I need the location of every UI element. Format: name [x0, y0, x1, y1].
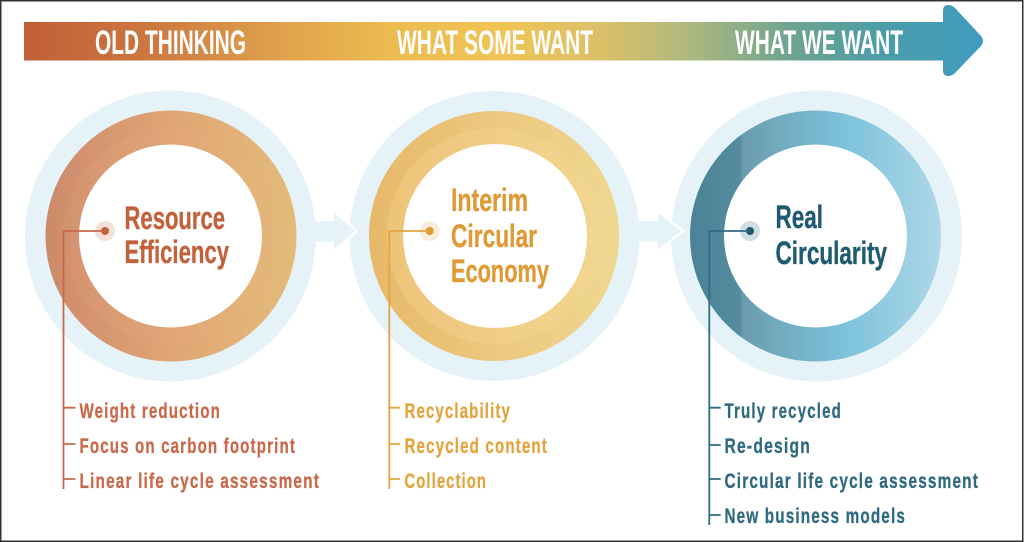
list: what we want items: Re-design: [724, 435, 811, 458]
ring 3: [690, 110, 941, 362]
panel: resource efficiency: [46, 110, 320, 493]
ring 1 inner glow: [63, 128, 279, 344]
panel: interim circular economy: [369, 111, 619, 493]
ring 2 inner glow: [386, 128, 602, 344]
heading: interim circular economy: Circular: [451, 218, 537, 254]
list: what we want items: New business models: [724, 505, 906, 528]
heading: real circularity: [776, 199, 887, 271]
heading: interim circular economy: [451, 182, 549, 289]
connector and dot 2: [389, 221, 440, 489]
label: what some want: WHAT SOME WANT: [397, 24, 593, 62]
connector arrow 2 outline: [658, 211, 683, 251]
top gradient arrow: [24, 5, 983, 76]
arrow shape: [24, 5, 983, 76]
connector and dot 1: [64, 221, 115, 489]
label: old thinking: OLD THINKING: [95, 24, 246, 62]
list: old thinking items: Focus on carbon footprint: [80, 435, 296, 458]
connector arrow 2: [633, 211, 683, 251]
list: what some want items: Collection: [404, 470, 487, 493]
label: what we want: WHAT WE WANT: [735, 24, 903, 62]
list: what some want items: [404, 400, 548, 493]
ring 3 centre: [724, 144, 907, 328]
list: old thinking items: Weight reduction: [80, 400, 221, 423]
pale halo: circle 3: [671, 90, 962, 382]
ring 1 centre: [79, 144, 262, 328]
connector arrow 1: [310, 211, 357, 251]
heading: resource efficiency: Efficiency: [124, 234, 229, 270]
connector arrow 1 outline: [334, 211, 357, 251]
pale halo: circle 1: [25, 90, 316, 382]
heading: interim circular economy: Interim: [451, 182, 528, 218]
panel: real circularity: [690, 110, 979, 528]
connector and dot 3: [709, 221, 760, 525]
list: what we want items: Truly recycled: [724, 400, 842, 423]
list: old thinking items: Linear life cycle assessment: [80, 470, 320, 493]
heading: resource efficiency: Resource: [124, 200, 225, 236]
ring 1: [46, 110, 296, 362]
list: what some want items: Recyclability: [404, 400, 511, 423]
ring 2 centre: [403, 144, 587, 328]
pale halo: circle 2: [350, 91, 640, 381]
heading: interim circular economy: Economy: [451, 253, 549, 289]
heading: resource efficiency: [124, 200, 229, 270]
list: old thinking items: [80, 400, 320, 493]
ring 2: [369, 111, 619, 361]
heading: real circularity: Circularity: [776, 235, 887, 271]
list: what some want items: Recycled content: [404, 435, 548, 458]
heading: real circularity: Real: [776, 199, 823, 235]
list: what we want items: [724, 400, 979, 528]
